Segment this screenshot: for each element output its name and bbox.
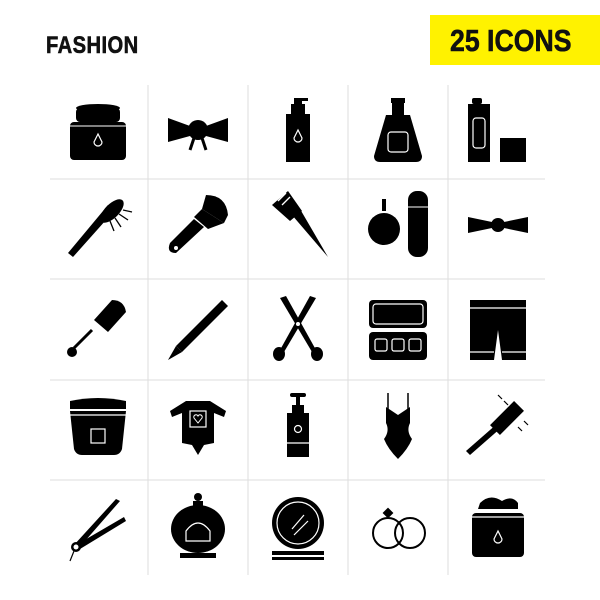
- icon: dye brush: [272, 191, 328, 257]
- icon: small bow: [468, 217, 528, 233]
- icon: makeup brush: [169, 195, 228, 253]
- icon: cream jar: [70, 104, 126, 160]
- icon: round brush: [466, 395, 528, 455]
- title: FASHION: [46, 32, 139, 59]
- icon: wedding rings: [373, 509, 425, 548]
- icon: scissors: [273, 296, 323, 361]
- icon: nail polish brush: [67, 300, 126, 357]
- icon: shorts: [470, 300, 526, 360]
- icon: bottle and box: [468, 98, 526, 162]
- badge: 25 icons: 25 ICONS: [450, 23, 572, 58]
- icon: mirror: [272, 497, 324, 560]
- icon: hair straightener: [70, 499, 126, 561]
- icon: flask bottle: [374, 98, 422, 162]
- icon: pencil brush: [168, 300, 228, 360]
- icon: round perfume bottle: [171, 493, 225, 558]
- icon: bow tie: [168, 118, 228, 150]
- icon: eyeshadow palette: [369, 300, 427, 360]
- icon: cream tub: [70, 398, 126, 455]
- icon: hair brush: [68, 195, 132, 257]
- icon: pump bottle: [286, 98, 310, 162]
- icon: baby bodysuit: [170, 401, 226, 455]
- icon: lotion pump: [287, 393, 309, 457]
- badge: 25 icons: [430, 15, 600, 65]
- icon: perfume and lipstick: [368, 191, 428, 257]
- icon: cream jar open: [472, 497, 524, 557]
- icon: swimsuit: [384, 393, 412, 459]
